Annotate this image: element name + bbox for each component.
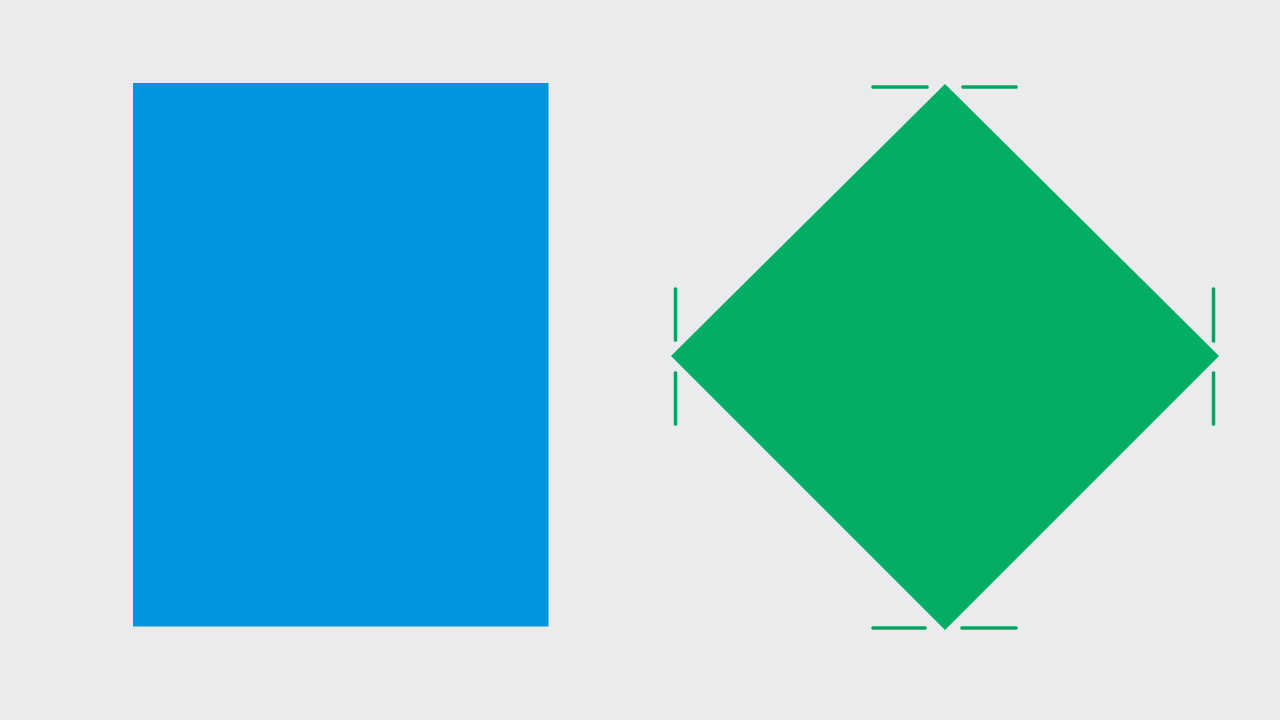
tick marks: left [674, 289, 677, 424]
tick marks: bottom [873, 626, 1016, 630]
tick marks: top [873, 85, 1016, 89]
blue rectangle [133, 83, 548, 626]
green diamond [671, 84, 1219, 630]
tick marks: right [1212, 289, 1215, 424]
